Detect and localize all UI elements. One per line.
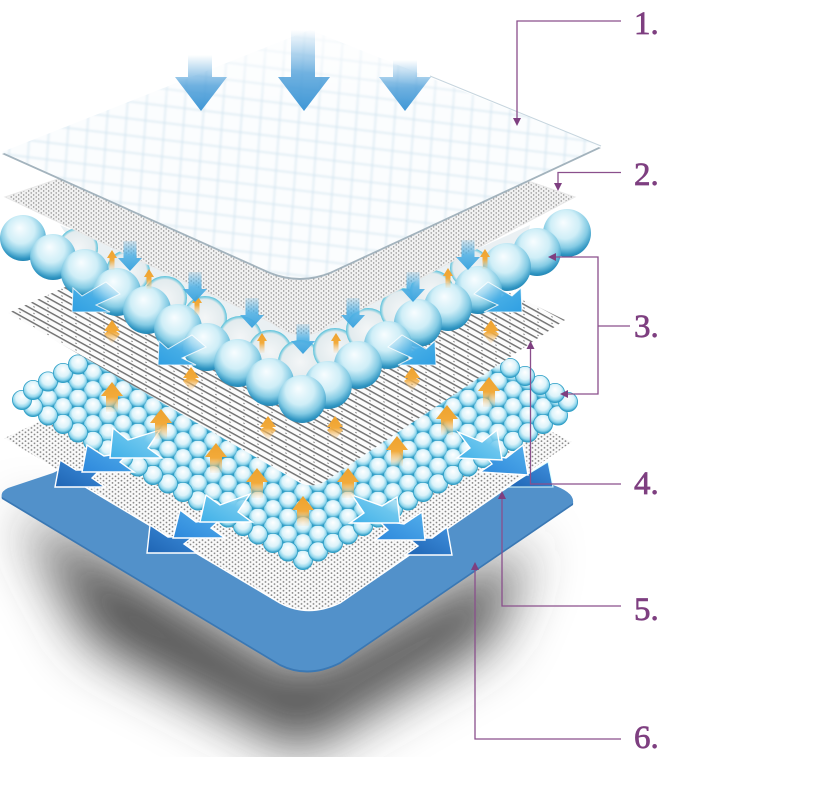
callout 3 (548, 253, 659, 398)
callout 3: 3. (634, 309, 659, 345)
illustration: exploded six-layer pad with callouts (0, 12, 657, 757)
callout 5: 5. (634, 592, 659, 628)
callout 2 (554, 157, 659, 193)
layer 5: lower perforated sheet (3, 300, 573, 610)
arrows: orange upward on absorbent grid (101, 377, 500, 526)
callout 6: 6. (634, 720, 659, 756)
callout 1 (513, 6, 659, 126)
callout 4: 4. (634, 466, 659, 502)
arrows: orange upward on striped sheet (104, 320, 499, 440)
arrows: dark blue outflow under layer 5 (right) (507, 462, 553, 487)
callout 4 (526, 341, 659, 502)
callout 2: 2. (634, 157, 659, 193)
callout 6 (471, 562, 659, 756)
layer 4 absorbent cell grid (hexagonal) (12, 240, 578, 570)
layer 3: rear row of spheres (58, 225, 530, 385)
arrows: large blue downward onto top sheet (175, 30, 431, 111)
edge cells of grid (12, 355, 578, 570)
callout 1: 1. (634, 6, 659, 42)
layer 1: quilted top sheet (2, 38, 602, 280)
ground shadow (20, 510, 530, 750)
layer 3: front row of spheres (0, 209, 591, 423)
layer 4: striped transfer sheet (8, 185, 565, 486)
callout 5 (498, 491, 659, 628)
layer 2: upper perforated sheet (5, 100, 575, 335)
arrows: small blue downward through perforated sheet (118, 240, 480, 354)
arrows: diagonal blue on spheres (72, 282, 522, 365)
arrows: orange small upward between spheres (107, 249, 490, 353)
arrows: large blue outflow arrows around absorbent grid (55, 428, 528, 555)
layer 6: blue backing sheet (2, 350, 573, 673)
